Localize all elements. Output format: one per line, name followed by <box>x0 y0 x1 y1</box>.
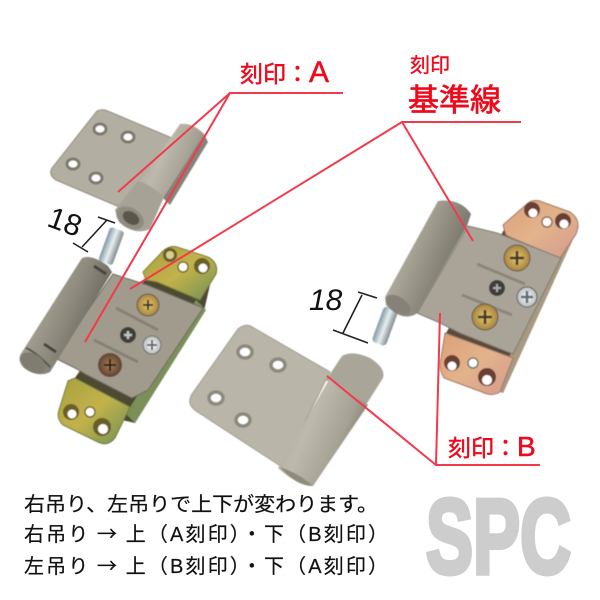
hinge: upper-left leaf A <box>51 110 208 234</box>
dimension: 18 upper: 18 <box>43 201 86 244</box>
hinge: lower-center leaf B <box>190 325 383 486</box>
label: reference line: 基準線 <box>408 83 501 118</box>
hinge: right body (pink) <box>371 200 578 394</box>
note text: 右吊り、左吊りで上下が変わります。 <box>24 493 378 516</box>
note text: 右吊り → 上（A刻印）・下（B刻印） <box>24 518 388 547</box>
label: stamp A: 刻印：A <box>240 56 329 89</box>
note text <box>24 493 388 579</box>
dimension: 18 right <box>309 284 377 343</box>
dimension: 18 right: 18 <box>309 284 343 317</box>
leader lines: reference line <box>130 122 521 289</box>
leader lines: B <box>327 313 540 465</box>
leader lines: A <box>85 93 343 342</box>
hinge: lower-left body (gold) <box>16 227 217 444</box>
label: stamp B: 刻印：B <box>448 431 536 462</box>
label: stamp small: 刻印 <box>410 54 450 77</box>
note text: 左吊り → 上（B刻印）・下（A刻印） <box>24 550 388 579</box>
dimension: 18 upper <box>43 201 115 252</box>
